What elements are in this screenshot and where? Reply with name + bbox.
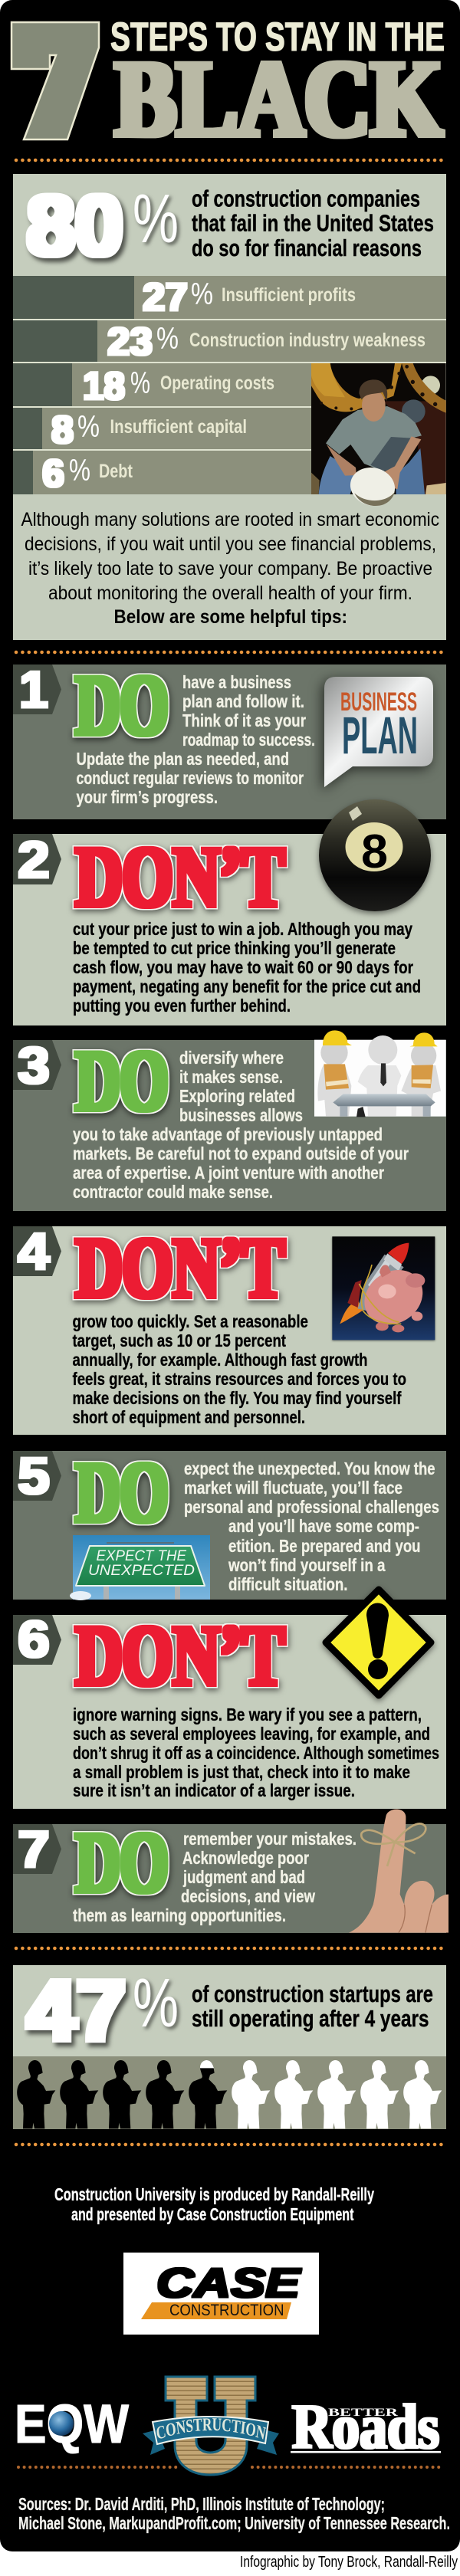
illustration: piggy bank rocket [332,1236,435,1340]
panel: step 2 [13,799,446,1025]
big numeral 7: 7 [17,5,94,168]
tip text: and you’ll have some comp- [228,1516,419,1536]
number badge [13,831,61,889]
stat description [192,1980,433,2032]
tip text: diversify where [179,1048,284,1068]
bar 18 percent: 18 [83,364,125,408]
tip text: short of equipment and personnel. [72,1407,305,1427]
tip text: be tempted to cut price thinking you’ll generate [73,938,396,958]
paragraph [21,509,439,628]
tip text: Think of it as your [182,710,306,730]
number badge: 1 [19,661,48,719]
tip text: roadmap to success. [182,730,315,750]
tip text: contractor could make sense. [73,1182,273,1202]
number badge [13,661,61,719]
bar 8 percent [13,408,311,451]
dotted divider [16,2143,443,2146]
tip text: plan and follow it. [182,691,304,711]
tip text: grow too quickly. Set a reasonable [72,1311,308,1331]
pictogram: ten workers [13,2056,446,2129]
tip text: target, such as 10 or 15 percent [72,1331,286,1350]
heading DO: DO [75,1445,169,1541]
icon: eight ball: 8 [361,825,388,878]
tip text [184,1459,439,1594]
illustration: finger with string bow [349,1810,449,1933]
tip text: Acknowledge poor [182,1848,309,1868]
bar 27 percent: Insufficient profits [222,284,356,306]
bar 27 percent [13,275,446,319]
bar 8 percent: % [77,410,100,444]
tip text: decisions, and view [181,1886,315,1906]
tip text: them as learning opportunities. [73,1905,286,1925]
tip text: won’t find yourself in a [228,1555,386,1575]
panel: step 6 [13,1608,446,1809]
bar 18 percent: % [130,366,150,400]
bar 27 percent: 27 [143,275,188,319]
number badge: 4 [18,1222,50,1281]
logo: Better Roads: Roads [292,2391,439,2463]
bar 6 percent: % [69,454,90,487]
percent sign: % [133,181,179,258]
dotted divider right [252,2466,442,2469]
number badge: 7 [18,1820,50,1879]
heading DON'T: DON’T [75,1220,285,1316]
tip text [73,1829,356,1925]
panel: step 3 [13,1030,446,1211]
number badge: 3 [18,1036,50,1094]
bar 23 percent: % [156,322,179,356]
tip text: have a business [182,672,291,692]
credits text [54,2184,374,2224]
panel: 80 percent statistic [13,174,446,276]
dotted divider [16,159,443,162]
panel: step 5 [13,1445,446,1600]
tip text: difficult situation. [228,1574,348,1594]
tip text [72,1311,406,1427]
number badge: 6 [18,1610,50,1669]
number badge [13,1036,61,1094]
number badge [13,1820,61,1879]
number badge: 2 [18,831,50,889]
bar 6 percent [13,451,311,495]
number badge [13,1447,61,1505]
bar 27 percent: % [191,277,213,311]
bar 6 percent: 6 [42,451,64,495]
bar 23 percent: 23 [107,320,153,363]
paragraph: about monitoring the overall health of your firm. [48,582,412,604]
illustration: expect the unexpected road sign [70,1535,210,1600]
tip text [77,672,315,807]
tip text [73,1705,439,1800]
ribbon banner [153,2417,268,2444]
logo: Case Construction: CASE [156,2260,301,2306]
dotted divider [16,1947,443,1950]
logo: EQW: EQW [15,2394,129,2455]
bar 6 percent: Debt [99,461,133,482]
ribbon text: CONSTRUCTION [156,2418,267,2440]
panel: step 4 [13,1220,446,1435]
bar chart: financial reasons [13,275,446,495]
bar 23 percent [13,320,446,363]
bar 18 percent: Operating costs [160,372,274,394]
letter U [166,2377,255,2475]
panel: 47 percent statistic [13,1962,446,2059]
icon: eight ball [319,799,431,911]
tip text: judgment and bad [182,1867,305,1887]
heading DO: DO [75,658,169,753]
dotted divider [16,651,443,654]
heading DO: DO [75,1815,169,1911]
tip text: area of expertise. A joint venture with another [73,1163,384,1183]
illustration: expect the unexpected road sign: EXPECT THE [97,1548,186,1564]
tip text: market will fluctuate, you’ll face [184,1478,402,1498]
sources text [18,2494,450,2533]
percent sign: % [133,1965,179,2042]
stat description [192,185,434,261]
panel: step 1 [13,658,446,819]
white workers [232,2060,442,2128]
tip text: putting you even further behind. [73,996,291,1016]
number badge [13,1610,61,1669]
tip text: conduct regular reviews to monitor [77,768,304,788]
heading DO: DO [75,1033,169,1129]
bar 8 percent: 8 [51,408,74,451]
panel: step 7 [13,1810,449,1933]
ribbon tails [143,2430,279,2455]
illustration: 3D figures around a table [314,1030,446,1117]
photo: worried construction worker [311,363,446,510]
logo: Better Roads: BETTER [328,2407,398,2419]
tip text: sure it isn’t an indicator of a larger issue. [73,1780,355,1800]
tip text: Update the plan as needed, and [77,749,289,769]
half white helmet [200,2060,214,2068]
title [12,5,445,168]
illustration: expect the unexpected road sign: UNEXPECTED [88,1563,195,1579]
tip text: your firm’s progress. [77,787,218,807]
icon: warning sign [326,1590,431,1695]
tip text: Exploring related [179,1086,295,1106]
stat number: 80 [27,178,123,274]
heading DON'T: DON’T [75,1608,285,1704]
tip text [73,919,421,1016]
tip text: you to take advantage of previously untapped [73,1124,383,1144]
number badge [13,1222,61,1281]
dotted divider left [18,2466,177,2469]
bar 18 percent [13,363,311,408]
icon: business plan speech bubble [324,677,433,787]
tip text: remember your mistakes. [183,1829,356,1849]
heading DON'T: DON’T [75,829,285,925]
tip text: businesses allows [179,1105,303,1125]
logo: Case Construction [123,2253,319,2335]
black workers [17,2060,227,2128]
panel: advice text [13,494,446,640]
stat number: 47 [27,1962,126,2059]
tip text: etition. Be prepared and you [228,1536,420,1556]
number badge: 5 [18,1447,50,1505]
tip text: it makes sense. [179,1067,283,1087]
logo: Construction U [143,2376,279,2476]
bar 8 percent: Insufficient capital [110,416,247,438]
tip text [73,1048,409,1202]
tip text: annually, for example. Although fast growth [72,1350,368,1370]
paragraph: Below are some helpful tips: [113,606,347,628]
logo: Case Construction: CONSTRUCTION [169,2302,284,2319]
